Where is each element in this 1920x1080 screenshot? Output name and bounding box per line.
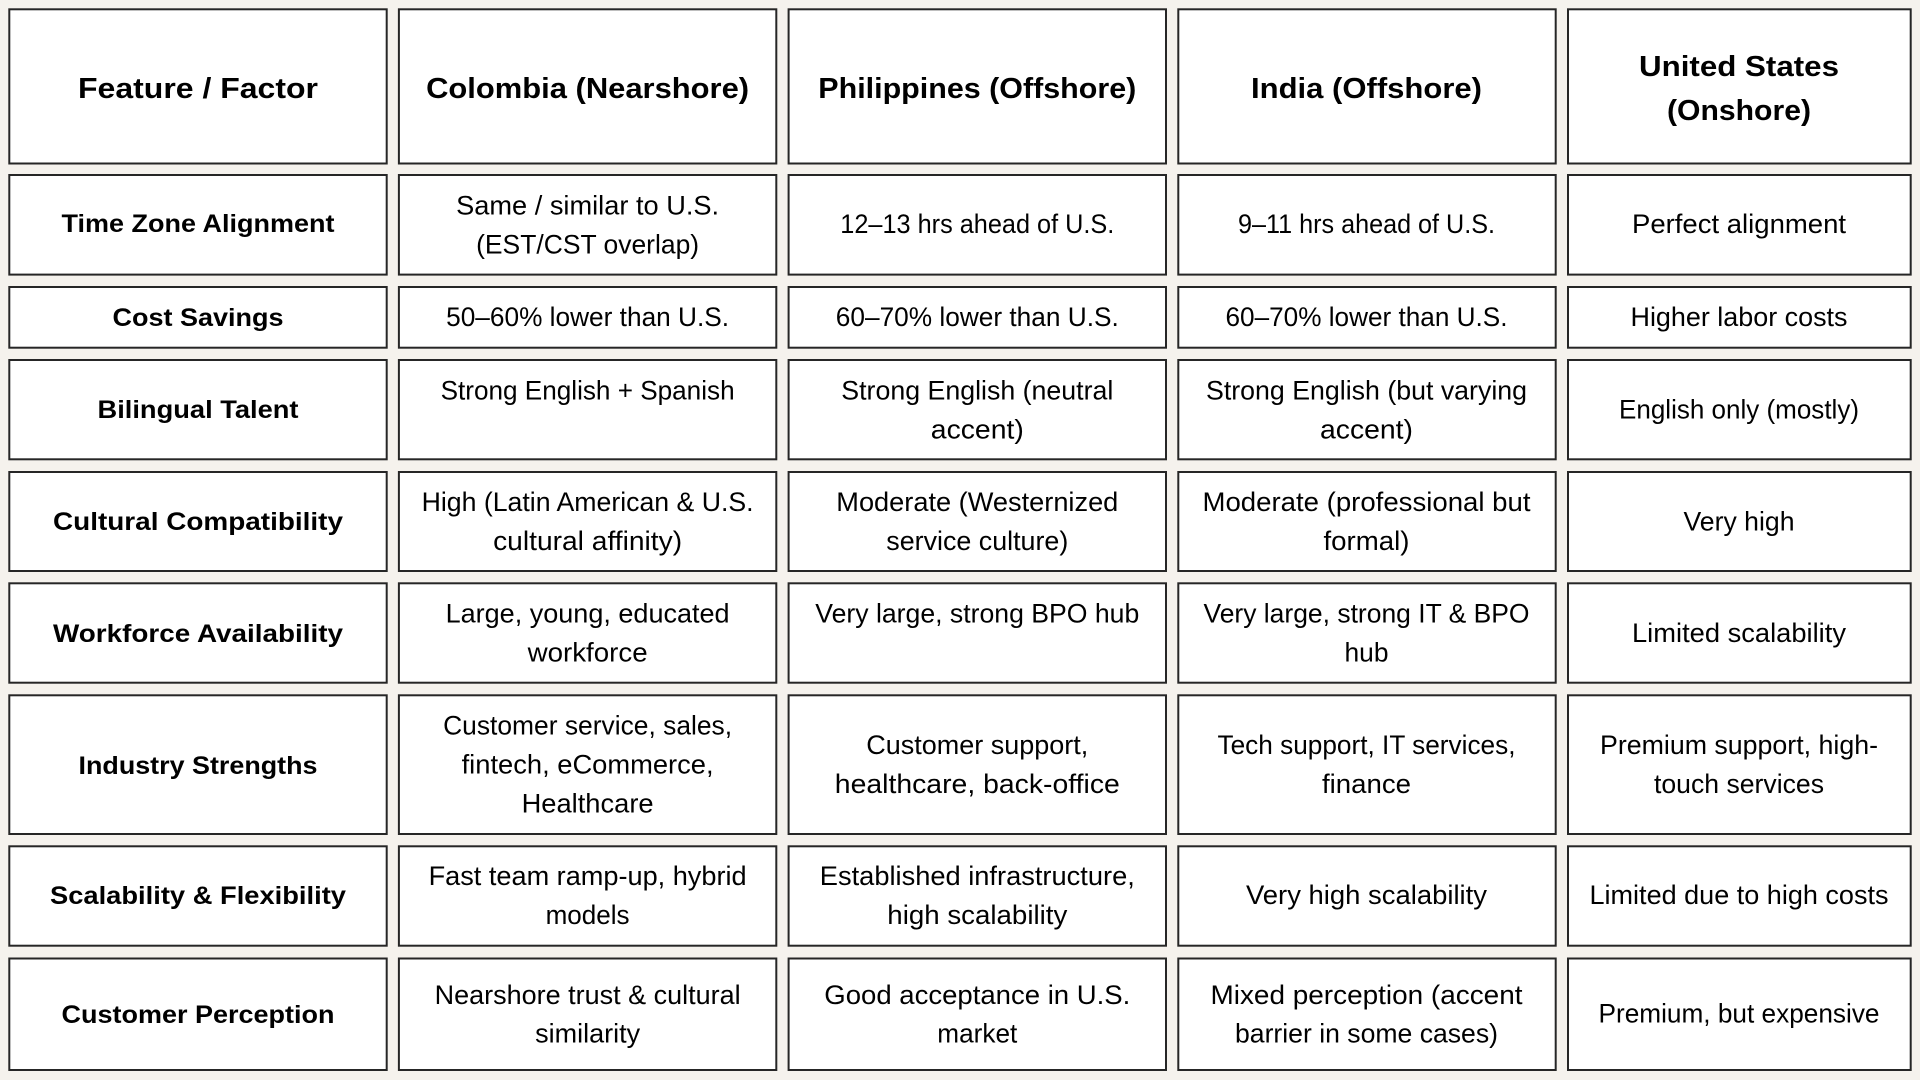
Colombia cell	[399, 287, 776, 348]
row: Cultural Compatibility	[9, 472, 1911, 571]
Philippines cell: Very large, strong BPO hub	[815, 598, 1139, 628]
United States cell: English only (mostly)	[1619, 394, 1859, 424]
United States cell: Premium support, high-	[1600, 730, 1878, 760]
header: India (Offshore): India (Offshore)	[1251, 73, 1482, 105]
row: Scalability & Flexibility	[9, 846, 1911, 946]
United States cell: Limited due to high costs	[1590, 880, 1888, 910]
United States cell: Higher labor costs	[1630, 302, 1848, 332]
India cell: barrier in some cases)	[1235, 1018, 1498, 1048]
India cell: Tech support, IT services,	[1218, 730, 1516, 760]
Colombia cell: High (Latin American & U.S.	[422, 487, 754, 517]
row label	[9, 472, 387, 571]
Philippines cell	[789, 846, 1166, 946]
header: United States (Onshore)	[1568, 9, 1911, 163]
row: Bilingual Talent	[9, 360, 1911, 459]
India cell: Moderate (professional but	[1202, 487, 1531, 517]
Colombia cell: 50–60% lower than U.S.	[446, 302, 729, 332]
Colombia cell: Healthcare	[522, 788, 654, 818]
United States cell: Very high	[1684, 506, 1794, 536]
header: India (Offshore)	[1178, 9, 1556, 163]
India cell	[1178, 846, 1556, 946]
Philippines cell	[789, 360, 1166, 459]
header: United States (Onshore): (Onshore)	[1667, 95, 1811, 127]
United States cell: Perfect alignment	[1632, 209, 1847, 239]
India cell: 60–70% lower than U.S.	[1226, 302, 1508, 332]
Philippines cell: accent)	[931, 414, 1024, 444]
row label	[9, 175, 387, 275]
Colombia cell	[399, 958, 776, 1070]
row label	[9, 695, 387, 834]
row: Workforce Availability	[9, 583, 1911, 683]
United States cell	[1568, 846, 1911, 946]
row label: Customer Perception	[62, 1001, 334, 1029]
India cell: formal)	[1324, 526, 1410, 556]
header row	[9, 9, 1911, 163]
Colombia cell	[399, 175, 776, 275]
India cell: hub	[1344, 638, 1388, 668]
Colombia cell	[399, 583, 776, 683]
Philippines cell	[789, 175, 1166, 275]
Colombia cell: models	[546, 900, 630, 930]
United States cell	[1568, 583, 1911, 683]
row label: Cultural Compatibility	[53, 508, 343, 536]
row label: Industry Strengths	[78, 752, 318, 780]
Philippines cell	[789, 583, 1166, 683]
row: Cost Savings	[9, 287, 1911, 348]
India cell: Very large, strong IT & BPO	[1204, 598, 1530, 628]
United States cell	[1568, 958, 1911, 1070]
Philippines cell	[789, 958, 1166, 1070]
India cell: Very high scalability	[1246, 880, 1488, 910]
row label	[9, 287, 387, 348]
India cell	[1178, 287, 1556, 348]
row label	[9, 846, 387, 946]
Colombia cell: Customer service, sales,	[443, 710, 732, 740]
header: Philippines (Offshore): Philippines (Offshore)	[818, 73, 1136, 105]
United States cell: Premium, but expensive	[1598, 999, 1880, 1029]
row: Customer Perception	[9, 958, 1911, 1070]
Philippines cell: Moderate (Westernized	[836, 487, 1118, 517]
row label	[9, 958, 387, 1070]
Colombia cell: Fast team ramp-up, hybrid	[429, 861, 747, 891]
Colombia cell: Strong English + Spanish	[441, 375, 735, 405]
row label	[9, 360, 387, 459]
Colombia cell	[399, 695, 776, 834]
Philippines cell: Good acceptance in U.S.	[824, 980, 1130, 1010]
India cell	[1178, 360, 1556, 459]
Philippines cell: Established infrastructure,	[820, 861, 1135, 891]
header: Colombia (Nearshore)	[399, 9, 776, 163]
Philippines cell: 60–70% lower than U.S.	[836, 302, 1119, 332]
United States cell: Limited scalability	[1632, 618, 1846, 648]
row label: Time Zone Alignment	[62, 210, 335, 238]
Colombia cell: Nearshore trust & cultural	[435, 980, 741, 1010]
Philippines cell: high scalability	[887, 900, 1068, 930]
Philippines cell	[789, 472, 1166, 571]
United States cell	[1568, 360, 1911, 459]
India cell: Mixed perception (accent	[1210, 980, 1523, 1010]
Philippines cell: market	[937, 1018, 1018, 1048]
row label: Workforce Availability	[53, 620, 343, 648]
header: Feature / Factor	[9, 9, 387, 163]
row label: Bilingual Talent	[98, 396, 299, 424]
United States cell	[1568, 287, 1911, 348]
India cell	[1178, 695, 1556, 834]
Philippines cell	[789, 695, 1166, 834]
row: Time Zone Alignment	[9, 175, 1911, 275]
India cell: finance	[1322, 769, 1411, 799]
India cell	[1178, 472, 1556, 571]
header: Philippines (Offshore)	[789, 9, 1166, 163]
Colombia cell	[399, 360, 776, 459]
Colombia cell: fintech, eCommerce,	[462, 749, 714, 779]
row label: Scalability & Flexibility	[50, 882, 346, 910]
India cell: 9–11 hrs ahead of U.S.	[1238, 209, 1495, 239]
United States cell	[1568, 695, 1911, 834]
India cell: Strong English (but varying	[1206, 375, 1527, 405]
Philippines cell: 12–13 hrs ahead of U.S.	[840, 209, 1114, 239]
Philippines cell: service culture)	[886, 526, 1068, 556]
Colombia cell: workforce	[527, 638, 648, 668]
header: Feature / Factor: Feature / Factor	[78, 73, 318, 105]
India cell	[1178, 175, 1556, 275]
Colombia cell	[399, 472, 776, 571]
Philippines cell: Customer support,	[866, 730, 1088, 760]
Philippines cell	[789, 287, 1166, 348]
United States cell	[1568, 472, 1911, 571]
Philippines cell: healthcare, back-office	[835, 769, 1120, 799]
India cell: accent)	[1320, 414, 1413, 444]
United States cell: touch services	[1654, 769, 1824, 799]
Colombia cell	[399, 846, 776, 946]
header: United States (Onshore): United States	[1639, 51, 1839, 83]
Philippines cell: Strong English (neutral	[841, 375, 1113, 405]
header: Colombia (Nearshore): Colombia (Nearshore)	[426, 73, 749, 105]
Colombia cell: Same / similar to U.S.	[456, 190, 719, 220]
Colombia cell: cultural affinity)	[493, 526, 682, 556]
row label: Cost Savings	[112, 304, 284, 332]
India cell	[1178, 958, 1556, 1070]
row label	[9, 583, 387, 683]
row: Industry Strengths	[9, 695, 1911, 834]
Colombia cell: Large, young, educated	[446, 598, 730, 628]
Colombia cell: similarity	[535, 1018, 641, 1048]
Colombia cell: (EST/CST overlap)	[476, 230, 699, 260]
United States cell	[1568, 175, 1911, 275]
India cell	[1178, 583, 1556, 683]
